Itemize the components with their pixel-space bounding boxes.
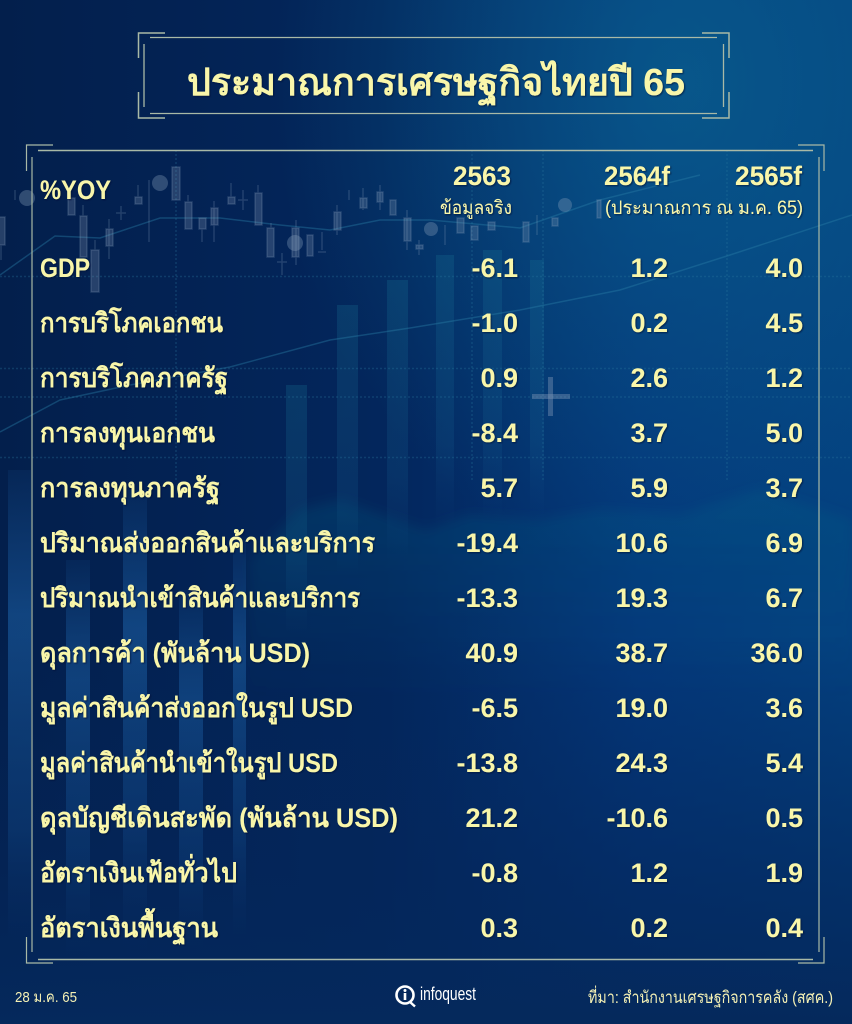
row: private consumption: -1.0 — [471, 308, 518, 338]
header: 2565f: 2565f — [735, 161, 803, 191]
row: core inflation: 0.2 — [630, 913, 668, 943]
row: import value: มูลค่าสินค้านำเข้าในรูป USD — [40, 747, 338, 780]
row: current account — [40, 803, 803, 835]
title frame — [138, 33, 729, 118]
row: current account: ดุลบัญชีเดินสะพัด (พันล้าน USD) — [40, 803, 398, 835]
row: import volume: 6.7 — [765, 583, 803, 613]
row: private consumption — [40, 306, 803, 338]
row: export volume: -19.4 — [456, 528, 518, 558]
row: private consumption: การบริโภคเอกชน — [40, 306, 223, 338]
row: public investment — [40, 473, 803, 506]
row: export volume: 6.9 — [765, 528, 803, 558]
background chart: dotted grid lines — [0, 150, 852, 480]
row: export value: มูลค่าสินค้าส่งออกในรูป USD — [40, 692, 353, 725]
row: trade balance: 36.0 — [750, 638, 803, 668]
title panel — [138, 33, 729, 118]
row: trade balance: ดุลการค้า (พันล้าน USD) — [40, 638, 310, 670]
row: public investment: การลงทุนภาครัฐ — [40, 473, 220, 506]
row: current account: 21.2 — [465, 803, 518, 833]
logo wordmark: infoquest — [420, 984, 476, 1004]
row: export volume: ปริมาณส่งออกสินค้าและบริการ — [40, 528, 375, 558]
row: export volume: 10.6 — [615, 528, 668, 558]
row: export value — [40, 692, 803, 725]
row: current account: 0.5 — [765, 803, 803, 833]
row: current account: -10.6 — [606, 803, 668, 833]
row: public investment: 3.7 — [765, 473, 803, 503]
row: private investment: 3.7 — [630, 418, 668, 448]
row: private investment — [40, 418, 803, 450]
row: import value: 5.4 — [765, 748, 803, 778]
header: 2563: 2563 — [453, 161, 511, 191]
title: ประมาณการเศรษฐกิจไทยปี 65 — [187, 60, 685, 107]
row: headline inflation: อัตราเงินเฟ้อทั่วไป — [40, 853, 237, 888]
row: export value: 3.6 — [765, 693, 803, 723]
row: public investment: 5.7 — [480, 473, 518, 503]
logo: infoquest — [396, 984, 476, 1006]
row: trade balance: 38.7 — [615, 638, 668, 668]
background chart: lower blue bars — [8, 470, 246, 960]
row: export value: -6.5 — [471, 693, 518, 723]
row: public consumption — [40, 361, 803, 396]
header: forecast sub: (ประมาณการ ณ ม.ค. 65) — [605, 198, 803, 219]
row: GDP: GDP — [40, 253, 90, 283]
row: import value: 24.3 — [615, 748, 668, 778]
table header — [40, 161, 803, 219]
row: core inflation — [40, 907, 803, 946]
header: 2563 sub: ข้อมูลจริง — [440, 198, 512, 219]
row: private investment: 5.0 — [765, 418, 803, 448]
row: core inflation: 0.3 — [480, 913, 518, 943]
row: headline inflation: 1.9 — [765, 858, 803, 888]
row: GDP: -6.1 — [471, 253, 518, 283]
background chart: trend lines — [0, 175, 852, 432]
background chart: candlesticks — [0, 167, 601, 292]
row: import volume: ปริมาณนำเข้าสินค้าและบริการ — [40, 583, 360, 613]
row: export value: 19.0 — [615, 693, 668, 723]
header: 2564f: 2564f — [604, 161, 671, 191]
row: public consumption: การบริโภคภาครัฐ — [40, 361, 228, 396]
background chart: round markers — [19, 175, 572, 251]
background chart: blurred mountain shape — [250, 490, 852, 700]
row: private investment: การลงทุนเอกชน — [40, 418, 215, 450]
row: trade balance: 40.9 — [465, 638, 518, 668]
row: import volume: 19.3 — [615, 583, 668, 613]
row: export volume — [40, 528, 803, 558]
row: private investment: -8.4 — [471, 418, 518, 448]
row: headline inflation: -0.8 — [471, 858, 518, 888]
header: %YOY: %YOY — [40, 175, 111, 205]
background chart: upper teal bars — [286, 250, 544, 635]
row: headline inflation — [40, 853, 803, 888]
row: import value — [40, 747, 803, 780]
row: private consumption: 0.2 — [630, 308, 668, 338]
row: private consumption: 4.5 — [765, 308, 803, 338]
row: GDP: 1.2 — [630, 253, 668, 283]
row: headline inflation: 1.2 — [630, 858, 668, 888]
row: GDP: 4.0 — [765, 253, 803, 283]
row: public investment: 5.9 — [630, 473, 668, 503]
row: trade balance — [40, 638, 803, 670]
row: core inflation: อัตราเงินพื้นฐาน — [40, 907, 219, 946]
row: import value: -13.8 — [456, 748, 518, 778]
table frame — [26, 145, 824, 963]
row: public consumption: 2.6 — [630, 363, 668, 393]
table rows — [40, 253, 803, 946]
row: public consumption: 1.2 — [765, 363, 803, 393]
footer: date: 28 ม.ค. 65 — [15, 989, 77, 1006]
row: import volume — [40, 583, 803, 613]
row: core inflation: 0.4 — [765, 913, 803, 943]
row: import volume: -13.3 — [456, 583, 518, 613]
background chart: plus marker — [532, 377, 570, 416]
icon: magnifier with i — [396, 986, 415, 1006]
row: GDP — [40, 253, 803, 283]
row: public consumption: 0.9 — [480, 363, 518, 393]
